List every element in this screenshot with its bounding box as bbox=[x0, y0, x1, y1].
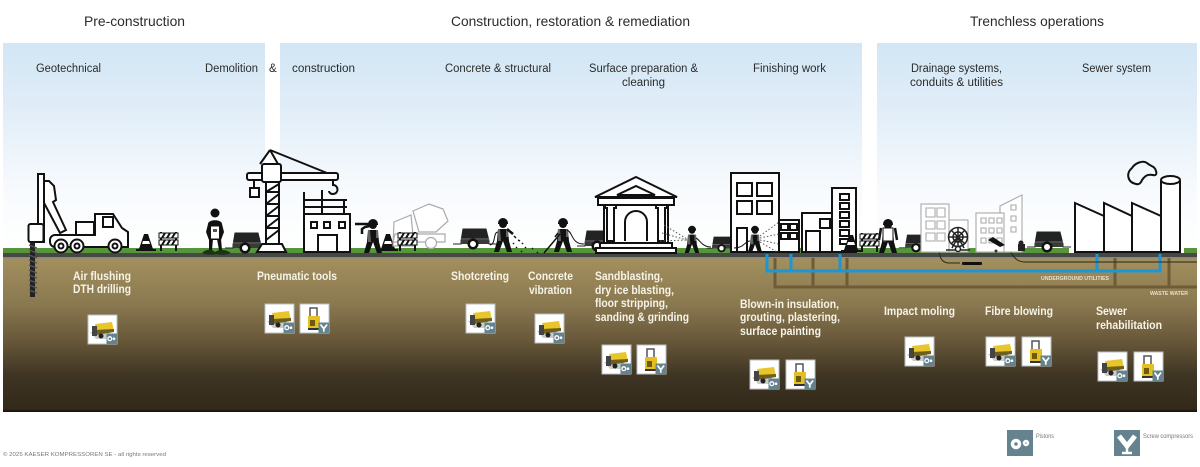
application: impact moling: Impact moling bbox=[884, 304, 955, 318]
category: surface preparation bbox=[589, 63, 698, 89]
application: shotcreting: Shotcreting bbox=[451, 269, 509, 283]
application: sandblasting: dry ice blasting, bbox=[595, 283, 674, 297]
traffic cone 3 bbox=[841, 235, 861, 252]
product card: sandblasting piston bbox=[602, 345, 631, 374]
abrasive spray bbox=[660, 225, 687, 241]
sky panel: construction bbox=[280, 43, 862, 249]
insulation spray bbox=[760, 222, 779, 253]
application: sandblasting: sanding & grinding bbox=[595, 310, 689, 324]
section heading: construction: Construction, restoration & remediation bbox=[451, 13, 690, 29]
category: demolition: Demolition bbox=[205, 63, 258, 75]
product card: pneumatic tools piston bbox=[265, 304, 294, 333]
grey background buildings bbox=[921, 195, 1022, 252]
category: finishing work: Finishing work bbox=[753, 63, 826, 75]
legend: pistons: Pistons bbox=[1036, 434, 1054, 440]
application: blown-in insulation: grouting, plastering, bbox=[740, 310, 840, 324]
drill rig truck bbox=[28, 174, 128, 297]
underground earth bbox=[3, 258, 1197, 412]
product card: pneumatic tools screw bbox=[300, 304, 329, 333]
category: sewer system: Sewer system bbox=[1082, 63, 1151, 75]
road surface bbox=[3, 253, 1197, 258]
compressor trailer 3 bbox=[577, 231, 621, 252]
product card: concrete vibration piston bbox=[535, 314, 564, 343]
construction building bbox=[303, 190, 350, 252]
cement mixer truck bbox=[393, 204, 448, 248]
worker with concrete vibrator bbox=[544, 218, 584, 253]
smoke cloud bbox=[1128, 162, 1156, 184]
category: surface preparation: cleaning bbox=[622, 77, 665, 89]
application: blown-in insulation: Blown-in insulation, bbox=[740, 297, 839, 311]
traffic cone bbox=[136, 234, 156, 251]
category: drainage bbox=[910, 63, 1003, 89]
application: sewer rehabilitation: Sewer bbox=[1096, 304, 1127, 318]
compressor trailer 5 bbox=[899, 235, 936, 252]
product card: sandblasting screw bbox=[637, 345, 666, 374]
traffic cone 2 bbox=[378, 234, 398, 251]
application: pneumatic tools: Pneumatic tools bbox=[257, 269, 337, 283]
application: blown-in insulation bbox=[740, 297, 840, 338]
product card: insulation piston bbox=[750, 360, 779, 389]
application: sewer rehabilitation bbox=[1096, 304, 1162, 332]
application: concrete vibration bbox=[528, 269, 573, 297]
application: concrete vibration: Concrete bbox=[528, 269, 573, 283]
category: concrete and structural: Concrete & structural bbox=[445, 63, 551, 75]
classical building bbox=[595, 177, 677, 253]
product card: shotcreting piston bbox=[466, 304, 495, 333]
application: fibre blowing: Fibre blowing bbox=[985, 304, 1053, 318]
legend: pistons bbox=[1007, 430, 1054, 456]
application: sandblasting: Sandblasting, bbox=[595, 269, 663, 283]
product card: sewer piston bbox=[1098, 352, 1127, 381]
product card: insulation screw bbox=[786, 360, 815, 389]
worker sandblasting bbox=[685, 226, 711, 253]
compressor trailer 2 bbox=[453, 229, 497, 250]
fibre blowing machine bbox=[988, 237, 1025, 252]
category: drainage: Drainage systems, bbox=[911, 63, 1002, 75]
category: surface preparation: Surface preparation & bbox=[589, 63, 698, 75]
application: sewer rehabilitation: rehabilitation bbox=[1096, 318, 1162, 332]
grass strip bbox=[3, 248, 1197, 253]
category: drainage: conduits & utilities bbox=[910, 77, 1003, 89]
application: blown-in insulation: surface painting bbox=[740, 324, 821, 338]
copyright: © 2025 KAESER KOMPRESSOREN SE - all rights reserved bbox=[3, 451, 166, 458]
underground utilities network bbox=[767, 246, 1197, 287]
compressor trailer 6 bbox=[1027, 232, 1071, 252]
category: ampersand: & bbox=[269, 63, 277, 75]
section heading: trenchless: Trenchless operations bbox=[970, 13, 1104, 29]
label: underground utilities: UNDERGROUND UTILITIES bbox=[1041, 276, 1109, 282]
road barrier bbox=[159, 232, 178, 251]
compressor trailer bbox=[225, 233, 269, 254]
product card: geotechnical piston bbox=[88, 315, 117, 344]
worker in safety vest bbox=[879, 219, 897, 253]
product card: sewer screw bbox=[1134, 352, 1163, 381]
legend: screw compressors bbox=[1114, 430, 1193, 456]
product card: impact moling piston bbox=[905, 337, 934, 366]
application: air flushing DTH drilling: DTH drilling bbox=[73, 282, 131, 296]
sky panel: trenchless bbox=[877, 43, 1197, 249]
application: air flushing DTH drilling bbox=[73, 269, 131, 296]
sky panel: pre-construction bbox=[3, 43, 265, 249]
application: air flushing DTH drilling: Air flushing bbox=[73, 269, 131, 283]
label: waste water: WASTE WATER bbox=[1150, 291, 1188, 297]
tower crane bbox=[247, 150, 338, 252]
product card: fibre blowing piston bbox=[986, 337, 1015, 366]
worker blowing insulation bbox=[734, 226, 762, 253]
road barrier 2 bbox=[398, 232, 417, 251]
application: concrete vibration: vibration bbox=[529, 283, 572, 297]
office building bbox=[731, 173, 779, 252]
worker shotcreting bbox=[490, 218, 538, 253]
worker with jackhammer bbox=[202, 208, 231, 255]
town buildings bbox=[779, 188, 856, 252]
road barrier 3 bbox=[860, 233, 879, 252]
application: sandblasting bbox=[595, 269, 689, 324]
legend: screw compressors: Screw compressors bbox=[1143, 434, 1193, 440]
product card: fibre blowing screw bbox=[1022, 337, 1051, 366]
category: geotechnical: Geotechnical bbox=[36, 63, 101, 75]
application: sandblasting: floor stripping, bbox=[595, 296, 668, 310]
cable reel bbox=[946, 227, 970, 252]
section heading: pre-construction: Pre-construction bbox=[84, 13, 185, 29]
category: construction: construction bbox=[292, 63, 355, 75]
worker with drill bbox=[355, 219, 382, 253]
factory bbox=[1075, 176, 1180, 252]
compressor trailer 4 bbox=[706, 237, 740, 252]
